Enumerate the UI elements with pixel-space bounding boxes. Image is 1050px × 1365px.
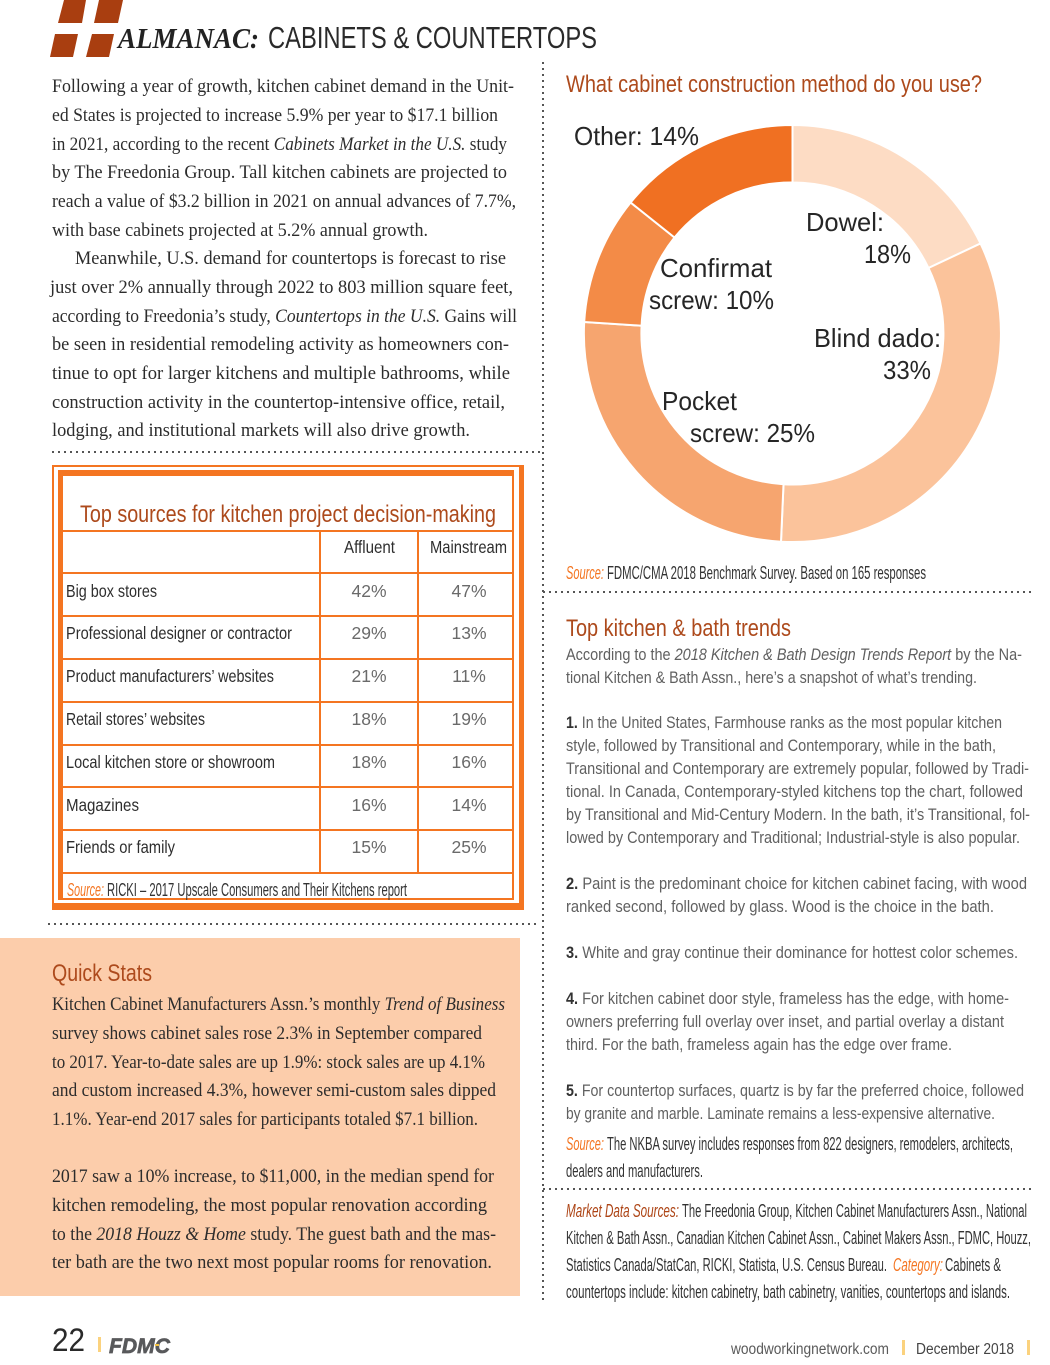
- table values: 18%: [351, 752, 387, 772]
- row labels: Retail stores’ websites: [66, 709, 205, 729]
- chart labels: Blind dado:: [814, 323, 941, 353]
- panel: quick stats: [0, 938, 520, 1296]
- footer: website and date: December 2018: [916, 1341, 1014, 1358]
- table values: 18%: [351, 709, 387, 729]
- trends text: [566, 646, 1030, 1123]
- table frame: [52, 465, 524, 910]
- intro text block: tinue to opt for larger kitchens and multiple bathrooms, while: [52, 364, 510, 384]
- row labels: Local kitchen store or showroom: [66, 752, 275, 772]
- intro text block: lodging, and institutional markets will also drive growth.: [52, 421, 470, 441]
- intro text block: just over 2% annually through 2022 to 803 million square feet,: [49, 278, 513, 298]
- quick stats text: ter bath are the two next most popular rooms for renovation.: [52, 1253, 492, 1273]
- intro text block: be seen in residential remodeling activity as homeowners con-: [52, 335, 509, 355]
- chart labels: screw: 25%: [690, 418, 815, 448]
- quick stats text: to the 2018 Houzz & Home study. The guest bath and the mas-: [52, 1225, 496, 1245]
- table values: 29%: [351, 623, 387, 643]
- footer: page number and logo: 22: [52, 1322, 85, 1358]
- market data sources: Market Data Sources:: [566, 1200, 679, 1221]
- table values: 16%: [451, 752, 487, 772]
- trends text: third. For the bath, frameless again has the edge over frame.: [566, 1036, 952, 1054]
- intro text block: with base cabinets projected at 5.2% annual growth.: [52, 221, 428, 241]
- chart source: [566, 562, 926, 583]
- column headers: Affluent: [344, 537, 395, 557]
- intro text block: Following a year of growth, kitchen cabinet demand in the Unit-: [52, 77, 514, 97]
- title: ALMANAC:: [116, 23, 259, 55]
- intro text block: [49, 77, 517, 441]
- intro text block: construction activity in the countertop-intensive office, retail,: [52, 393, 505, 413]
- chart labels: Pocket: [662, 386, 738, 416]
- quick stats heading: Quick Stats: [52, 960, 152, 987]
- donut chart: [584, 125, 1001, 542]
- row labels: Big box stores: [66, 581, 157, 601]
- quick stats text: [52, 995, 505, 1273]
- title: [116, 20, 597, 55]
- trends text: According to the 2018 Kitchen & Bath Design Trends Report by the Na-: [566, 646, 1022, 664]
- intro text block: in 2021, according to the recent Cabinets Market in the U.S. study: [52, 135, 508, 155]
- table values: 11%: [452, 666, 486, 686]
- row labels: Professional designer or contractor: [66, 623, 292, 643]
- intro text block: ed States is projected to increase 5.9% per year to $17.1 billion: [52, 106, 498, 126]
- table values: 13%: [451, 623, 487, 643]
- footer: page number and logo: [52, 1322, 171, 1358]
- panel: decision-making table: [52, 465, 524, 910]
- row labels: Magazines: [66, 795, 139, 815]
- table source: [67, 879, 407, 900]
- intro text block: by The Freedonia Group. Tall kitchen cabinets are projected to: [52, 163, 507, 183]
- table values: 25%: [451, 837, 487, 857]
- chart labels: screw: 10%: [649, 285, 774, 315]
- trends text: tional Kitchen & Bath Assn., here’s a snapshot of what’s trending.: [566, 669, 977, 687]
- table values: 42%: [351, 581, 387, 601]
- table values: 16%: [351, 795, 387, 815]
- row labels: [66, 581, 292, 857]
- trends source: Source:: [566, 1133, 604, 1154]
- trends text: style, followed by Transitional and Contemporary, while in the bath,: [566, 737, 996, 755]
- trends source: dealers and manufacturers.: [566, 1160, 703, 1181]
- chart labels: Dowel:: [806, 207, 884, 237]
- footer: website and date: woodworkingnetwork.com: [730, 1341, 889, 1358]
- column headers: [344, 537, 507, 557]
- table heading: Top sources for kitchen project decision-making: [80, 501, 496, 528]
- column headers: Mainstream: [430, 537, 507, 557]
- chart source: Source:: [566, 562, 604, 583]
- trends text: ranked second, followed by glass. Wood is the choice in the bath.: [566, 898, 994, 916]
- intro text block: according to Freedonia’s study, Countertops in the U.S. Gains will: [52, 307, 517, 327]
- footer: page number and logo: FDMC: [109, 1335, 171, 1358]
- trends source: [566, 1133, 1013, 1181]
- row labels: Product manufacturers’ websites: [66, 666, 274, 686]
- footer: website and date: [730, 1340, 1030, 1358]
- chart labels: Confirmat: [660, 253, 773, 283]
- market data sources: [566, 1200, 1031, 1302]
- quick stats text: Kitchen Cabinet Manufacturers Assn.’s monthly Trend of Business: [52, 995, 505, 1015]
- intro text block: Meanwhile, U.S. demand for countertops is forecast to rise: [75, 249, 506, 269]
- trends text: owners preferring full overlay over inset, and partial overlay a distant: [566, 1013, 1004, 1031]
- intro text block: reach a value of $3.2 billion in 2021 on annual advances of 7.7%,: [52, 192, 516, 212]
- quick stats text: kitchen remodeling, the most popular renovation according: [52, 1196, 487, 1216]
- quick stats text: to 2017. Year-to-date sales are up 1.9%: stock sales are up 4.1%: [52, 1053, 485, 1073]
- market data sources: Cabinets &: [945, 1254, 1001, 1275]
- quick stats text: survey shows cabinet sales rose 2.3% in September compared: [52, 1024, 483, 1044]
- row labels: Friends or family: [66, 837, 175, 857]
- quick stats text: 2017 saw a 10% increase, to $11,000, in the median spend for: [52, 1167, 494, 1187]
- chart labels: [574, 121, 941, 448]
- table values: 47%: [451, 581, 487, 601]
- table values: 19%: [451, 709, 487, 729]
- table values: 21%: [351, 666, 387, 686]
- table source: RICKI – 2017 Upscale Consumers and Their Kitchens report: [107, 879, 407, 900]
- table source: Source:: [67, 879, 104, 900]
- quick stats text: 1.1%. Year-end 2017 sales for participants totaled $7.1 billion.: [52, 1110, 478, 1130]
- chart labels: Other: 14%: [574, 121, 699, 151]
- title: CABINETS & COUNTERTOPS: [268, 20, 597, 55]
- chart labels: 18%: [864, 239, 911, 269]
- market data sources: Category:: [893, 1254, 943, 1275]
- chart labels: 33%: [883, 355, 931, 385]
- quick stats text: and custom increased 4.3%, however semi-custom sales dipped: [52, 1081, 497, 1101]
- table values: 14%: [451, 795, 487, 815]
- table values: 15%: [351, 837, 387, 857]
- trends heading: Top kitchen & bath trends: [566, 615, 791, 642]
- logo: hash mark: [50, 0, 123, 57]
- table values: [351, 581, 487, 857]
